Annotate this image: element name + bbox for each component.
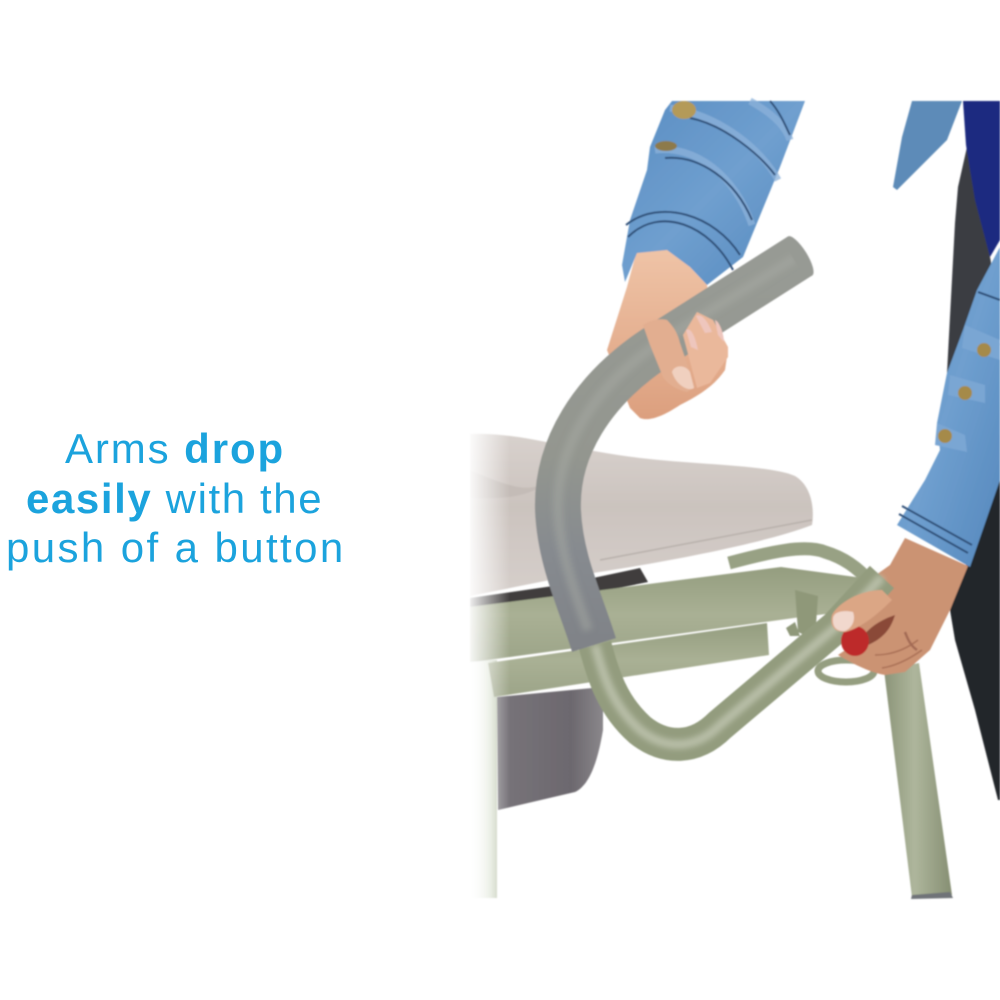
gripping thumb and fingers: [643, 312, 728, 392]
green curved rear rail: [729, 549, 870, 582]
seat underside hardware: [470, 568, 648, 612]
thumb pressing button: [831, 590, 892, 632]
heading: arms drop easily with the push of a button: easily with the: [26, 475, 323, 522]
green drop arm tube: [595, 577, 882, 744]
left front leg: [470, 660, 497, 898]
commode bucket: [497, 687, 603, 810]
green lower frame bar: [488, 623, 769, 697]
heading: arms drop easily with the push of a button: push of a button: [6, 524, 346, 571]
lower hand: [838, 538, 968, 675]
wedding ring: [905, 632, 917, 650]
left denim sleeve with buttons: [622, 101, 805, 285]
seat cushion: [470, 434, 813, 596]
red release button: [841, 626, 869, 656]
navy blouse: [963, 101, 1000, 257]
denim jacket collar: [893, 101, 962, 190]
left fade overlay on chair: [460, 428, 510, 903]
padded grey arm rest: [558, 233, 818, 645]
bracket and bolt: [786, 590, 818, 640]
green seat frame bar: [470, 567, 863, 662]
right rear leg: [884, 663, 953, 899]
heading: arms drop easily with the push of a button: [6, 425, 346, 571]
dark trousers: [947, 147, 1000, 800]
upper hand behind grab bar: [607, 248, 728, 419]
heading: arms drop easily with the push of a button: Arms drop: [65, 425, 285, 472]
rear ring catch: [818, 660, 874, 682]
photo illustration of commode arm and hands: [470, 101, 1000, 899]
right denim sleeve with buttons: [897, 247, 1000, 567]
